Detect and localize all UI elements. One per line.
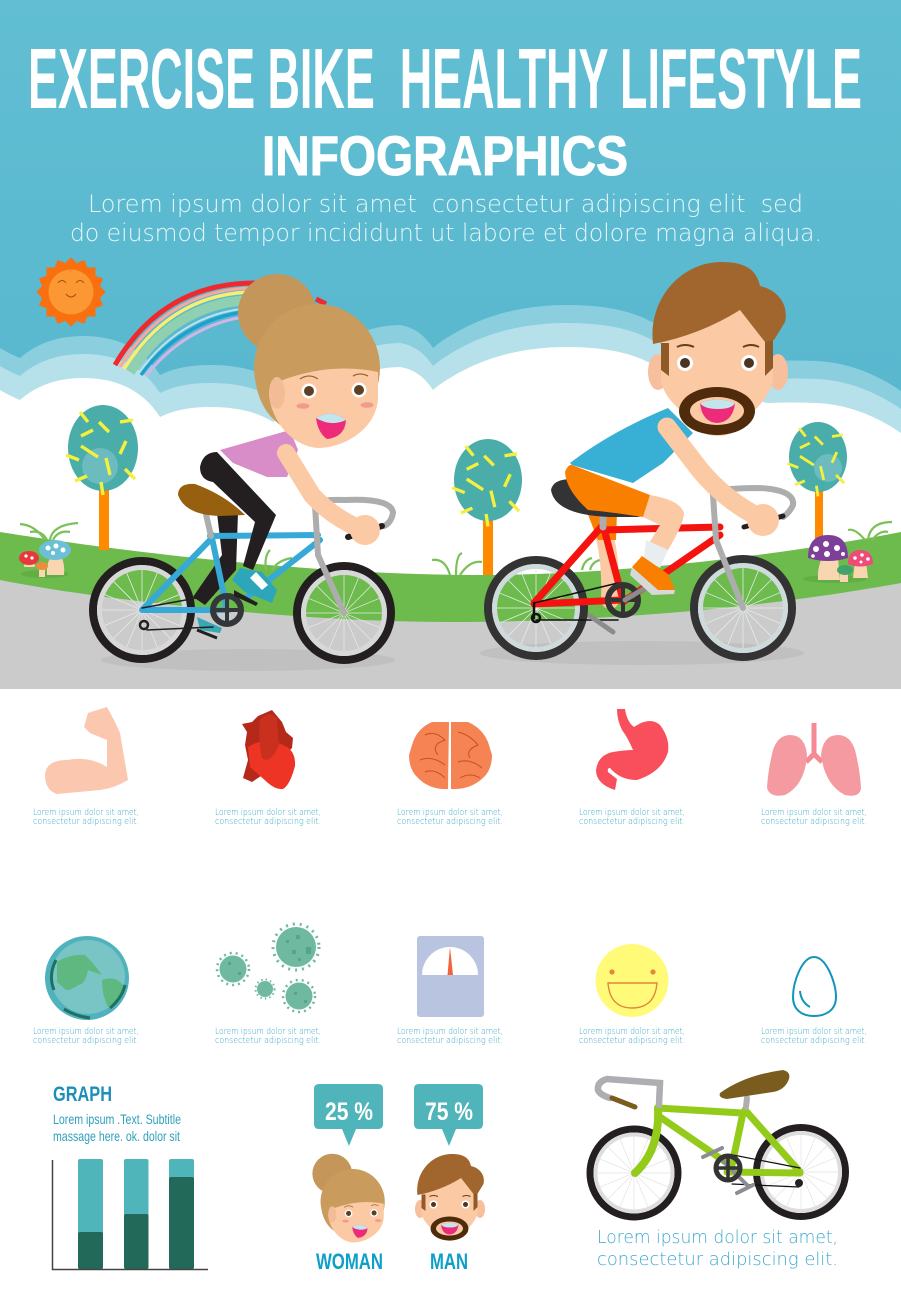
icon: stomach <box>596 709 668 790</box>
woman face <box>312 1154 385 1242</box>
graph subtitle: Lorem ipsum .Text. Subtitle <box>53 1111 181 1127</box>
woman back shoe <box>197 617 222 638</box>
clouds <box>0 305 901 580</box>
icon: rainbow <box>115 283 326 376</box>
caption: earth: Lorem ipsum dolor sit amet, <box>33 1027 139 1037</box>
woman bike wheels <box>93 561 391 660</box>
intro text <box>70 190 822 247</box>
caption: lungs <box>761 808 867 827</box>
callout: 75 percent: 75 % <box>425 1098 473 1126</box>
man seat <box>551 479 640 517</box>
icon: weight scale <box>417 936 484 1017</box>
caption: drop: consectetur adipiscing elit. <box>761 1036 867 1046</box>
gender statistics <box>312 1084 485 1274</box>
caption: scale: consectetur adipiscing elit. <box>397 1036 503 1046</box>
woman arm <box>286 453 380 545</box>
label: woman: WOMAN <box>316 1249 383 1274</box>
caption: earth: consectetur adipiscing elit. <box>33 1036 139 1046</box>
woman top <box>220 430 298 477</box>
icon: heart <box>242 710 295 789</box>
intro text: do eiusmod tempor incididunt ut labore et dolore magna aliqua. <box>70 219 822 247</box>
green bike frame <box>635 1108 800 1173</box>
man front leg <box>643 495 684 558</box>
woman back leg <box>193 513 238 605</box>
caption: smiley <box>579 1027 685 1046</box>
man shorts <box>565 465 650 517</box>
green bike drivetrain <box>703 1148 802 1193</box>
benefit row 2 <box>33 924 867 1046</box>
caption: drop <box>761 1027 867 1046</box>
caption: scale: Lorem ipsum dolor sit amet, <box>397 1027 503 1037</box>
man upper back leg <box>587 512 617 540</box>
woman shoe <box>232 568 277 606</box>
subtitle: infographics: INFOGRAPHICS <box>262 124 628 187</box>
tree middle <box>452 439 522 575</box>
mushrooms right <box>803 535 873 583</box>
man back leg <box>598 515 610 600</box>
man bike frame <box>532 488 793 632</box>
caption: stomach: Lorem ipsum dolor sit amet, <box>579 808 685 818</box>
woman seat <box>178 484 245 516</box>
man cyclist <box>488 262 793 657</box>
tree right <box>788 422 847 543</box>
caption: heart <box>215 808 321 827</box>
bicycle caption: consectetur adipiscing elit. <box>597 1249 838 1270</box>
icon: lungs <box>767 723 861 796</box>
sky background <box>0 0 901 420</box>
caption: drop: Lorem ipsum dolor sit amet, <box>761 1027 867 1037</box>
green bike wheels <box>590 1128 846 1217</box>
icon: muscle arm <box>45 707 128 794</box>
woman head <box>238 274 380 448</box>
caption: earth <box>33 1027 139 1046</box>
caption: viruses: Lorem ipsum dolor sit amet, <box>215 1027 321 1037</box>
caption: stomach <box>579 808 685 827</box>
man shirt <box>570 408 693 483</box>
caption: muscle: consectetur adipiscing elit. <box>33 817 139 827</box>
graph subtitle <box>53 1111 181 1144</box>
tree left <box>66 405 138 550</box>
caption: lungs: Lorem ipsum dolor sit amet, <box>761 808 867 818</box>
green bike seat <box>720 1070 789 1099</box>
caption: brain <box>397 808 503 827</box>
hill <box>0 532 901 640</box>
callout: 75 percent <box>414 1084 483 1146</box>
caption: smiley: Lorem ipsum dolor sit amet, <box>579 1027 685 1037</box>
graph heading: GRAPH <box>53 1083 112 1106</box>
callout: 25 percent: 25 % <box>325 1098 373 1126</box>
caption: heart: consectetur adipiscing elit. <box>215 817 321 827</box>
man head <box>648 262 788 436</box>
mushrooms left <box>19 540 71 578</box>
caption: brain: consectetur adipiscing elit. <box>397 817 503 827</box>
icon: smiley <box>596 944 668 1017</box>
woman front leg <box>200 452 276 570</box>
woman bike frame <box>140 500 393 630</box>
caption: brain: Lorem ipsum dolor sit amet, <box>397 808 503 818</box>
benefit row 1 <box>33 707 867 827</box>
man face <box>415 1154 485 1241</box>
man shoe <box>630 556 675 595</box>
icon: earth <box>45 936 129 1020</box>
icon: brain <box>409 722 492 789</box>
icon: viruses <box>217 924 319 1012</box>
caption: viruses: consectetur adipiscing elit. <box>215 1036 321 1046</box>
graph subtitle: massage here. ok. dolor sit <box>53 1128 180 1144</box>
green bicycle <box>590 1070 846 1217</box>
caption: muscle <box>33 808 139 827</box>
man arm <box>667 427 779 536</box>
caption: scale <box>397 1027 503 1046</box>
icon: water drop <box>793 957 836 1016</box>
grass tufts <box>20 522 892 575</box>
caption: heart: Lorem ipsum dolor sit amet, <box>215 808 321 818</box>
callout: 25 percent <box>314 1084 383 1146</box>
man bike wheels <box>488 559 792 657</box>
caption: lungs: consectetur adipiscing elit. <box>761 817 867 827</box>
caption: smiley: consectetur adipiscing elit. <box>579 1036 685 1046</box>
bicycle caption <box>597 1227 838 1270</box>
icon: sun <box>36 257 106 327</box>
caption: muscle: Lorem ipsum dolor sit amet, <box>33 808 139 818</box>
graph panel <box>52 1083 208 1270</box>
road <box>0 580 901 689</box>
caption: stomach: consectetur adipiscing elit. <box>579 817 685 827</box>
label: man: MAN <box>430 1249 468 1274</box>
road shadows <box>101 641 804 671</box>
caption: viruses <box>215 1027 321 1046</box>
woman cyclist <box>93 274 393 660</box>
man sock <box>644 540 668 568</box>
intro text: Lorem ipsum dolor sit amet consectetur adipiscing elit sed <box>88 190 803 218</box>
bar chart <box>52 1159 208 1270</box>
bicycle caption: Lorem ipsum dolor sit amet, <box>597 1227 838 1248</box>
green bike handlebar <box>598 1079 747 1107</box>
